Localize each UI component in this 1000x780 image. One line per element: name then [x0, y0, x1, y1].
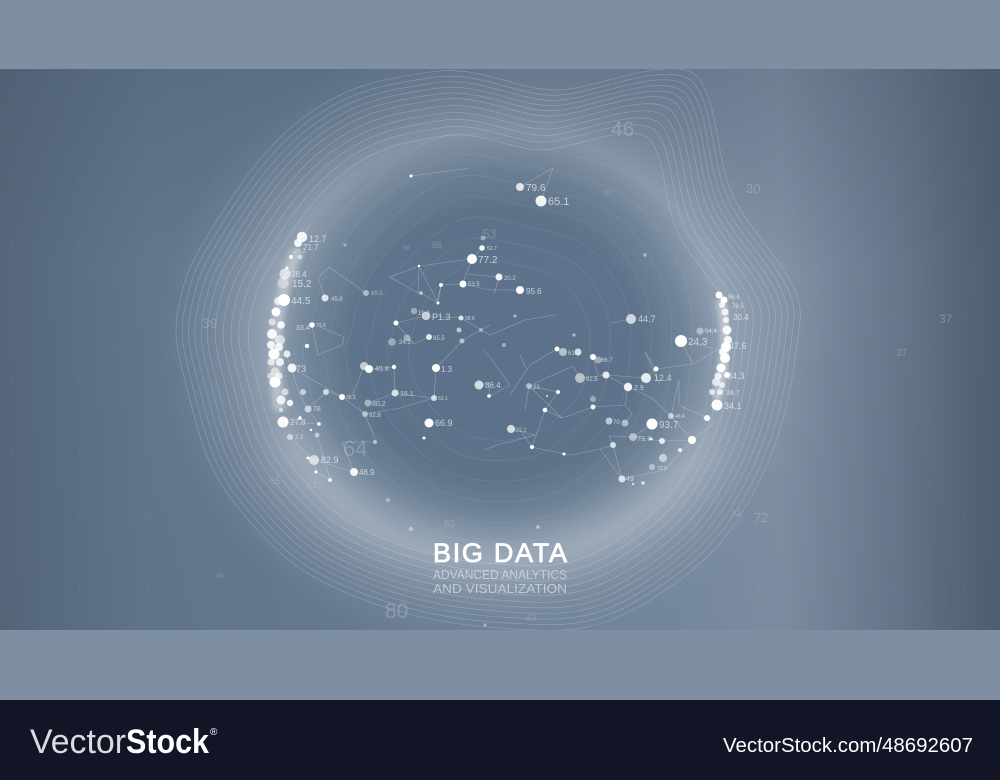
- footer bar: [0, 700, 1000, 780]
- footer image id: VectorStock.com/48692607: [723, 735, 973, 757]
- data value labels: P1.3: [432, 312, 451, 322]
- subtitle: ADVANCED ANALYTICS: [433, 568, 567, 582]
- data value labels: 12.4: [654, 373, 672, 383]
- crescent glow right: [716, 300, 725, 400]
- data value labels: 26.2: [294, 249, 306, 255]
- panel background: [0, 69, 1000, 630]
- faint big numbers: 36: [402, 245, 410, 252]
- data value labels: 2.2: [295, 435, 304, 441]
- subtitle: AND VISUALIZATION: [433, 582, 567, 596]
- data value labels: 66.7: [601, 358, 613, 364]
- data value labels: 79.6: [526, 183, 546, 194]
- data value labels: 44.5: [291, 296, 311, 307]
- data value labels: 49: [626, 476, 634, 483]
- dot grid: [0, 69, 1000, 630]
- faint big numbers: 37: [896, 348, 908, 359]
- data value labels: 1.3: [441, 365, 453, 374]
- data value labels: 73: [296, 364, 306, 374]
- data value labels: 92.8: [369, 413, 381, 419]
- title block: [433, 538, 567, 596]
- data value labels: 24.3: [688, 337, 708, 348]
- data value labels: 96.6: [728, 295, 740, 301]
- data value labels: 80.2: [372, 401, 386, 408]
- data value labels: 28.1: [346, 395, 356, 401]
- data points: [267, 174, 732, 627]
- footer logo: Stock: [126, 723, 209, 761]
- faint big numbers: 43: [526, 613, 536, 623]
- crescent glow left: [276, 250, 298, 410]
- data value labels: 48.4: [675, 414, 685, 420]
- data value labels: 98.6: [465, 316, 475, 322]
- data value labels: 92.5: [586, 377, 598, 383]
- vertical shading: [11, 69, 998, 202]
- faint big numbers: 64: [343, 436, 367, 461]
- faint big numbers: 45: [216, 573, 224, 580]
- contour lines inner: [282, 134, 713, 563]
- subtitle: [433, 568, 567, 596]
- data value labels: 95.6: [526, 287, 542, 296]
- data value labels: 45.8: [331, 297, 343, 303]
- data value labels: 93.7: [659, 420, 679, 431]
- faint big numbers: 55: [270, 476, 280, 486]
- faint big numbers: 39: [202, 315, 218, 331]
- data value labels: 20.2: [504, 276, 516, 282]
- data value labels: 34.3: [727, 371, 745, 381]
- data value labels: 38.7: [726, 390, 740, 397]
- data value labels: 89.5: [371, 291, 383, 297]
- data value labels: 27.8: [290, 418, 306, 427]
- data value labels: 53.5: [468, 282, 480, 288]
- faint big numbers: 46: [611, 118, 634, 141]
- data value labels: 86.4: [485, 381, 501, 390]
- data value labels: 78: [313, 406, 321, 413]
- data value labels: 65.1: [548, 196, 569, 208]
- data value labels: [290, 183, 749, 483]
- data value labels: 70: [613, 420, 620, 426]
- faint big numbers: 30: [746, 181, 760, 196]
- faint big numbers: 72: [754, 510, 768, 525]
- faint big numbers: 83: [444, 519, 456, 530]
- data value labels: 61.2: [568, 351, 580, 357]
- data value labels: 77.2: [478, 255, 498, 266]
- footer logo: [30, 723, 218, 761]
- data value labels: 82.9: [321, 455, 339, 465]
- contour lines outer: [176, 69, 800, 630]
- data value labels: 12.7: [309, 234, 327, 244]
- faint big numbers: 80: [385, 600, 408, 623]
- data value labels: 44.7: [638, 314, 656, 324]
- data value labels: 73.9: [657, 466, 667, 472]
- data value labels: 38.4: [291, 270, 307, 279]
- faint big numbers: 65: [432, 240, 442, 250]
- bottom band: [0, 630, 1000, 700]
- faint big numbers: 32: [731, 508, 741, 518]
- data value labels: 66.9: [435, 418, 453, 428]
- sphere halo glow: [188, 74, 769, 626]
- data value labels: 78.5: [732, 304, 744, 310]
- data value labels: 30.4: [733, 313, 749, 322]
- panel: main visualization: [0, 69, 1000, 630]
- data value labels: 34.1: [724, 401, 742, 411]
- data value labels: 23: [533, 385, 540, 391]
- faint big numbers: 53: [483, 227, 497, 241]
- data value labels: 52.7: [487, 246, 497, 252]
- footer logo: ®: [210, 727, 218, 738]
- faint big numbers: 61: [307, 480, 317, 490]
- network lines: [283, 168, 727, 480]
- data value labels: 47.6: [729, 341, 747, 351]
- data value labels: 24.1: [399, 340, 411, 346]
- data value labels: 95.5: [433, 336, 445, 342]
- top band: [0, 0, 1000, 69]
- data value labels: 2.9: [634, 385, 644, 392]
- data value labels: 15.1: [400, 391, 414, 398]
- faint big numbers: 37: [939, 312, 953, 326]
- data value labels: 71.7: [303, 243, 319, 252]
- data value labels: 79.6: [316, 323, 326, 329]
- data value labels: 39.2: [515, 428, 527, 434]
- data value labels: 45.8: [375, 366, 389, 373]
- data value labels: 15.2: [292, 279, 312, 290]
- data value labels: 73.7: [637, 436, 651, 443]
- data value labels: 54.4: [705, 329, 717, 335]
- heading: big data: BIG DATA: [433, 538, 567, 568]
- footer logo: Vector: [30, 723, 126, 761]
- data value labels: 53.1: [438, 396, 448, 402]
- data value labels: 46.9: [359, 468, 375, 477]
- data value labels: 19.9: [418, 311, 430, 317]
- faint big numbers: [202, 118, 953, 623]
- data value labels: 33.4: [296, 325, 310, 332]
- faint big numbers: 37: [603, 189, 612, 198]
